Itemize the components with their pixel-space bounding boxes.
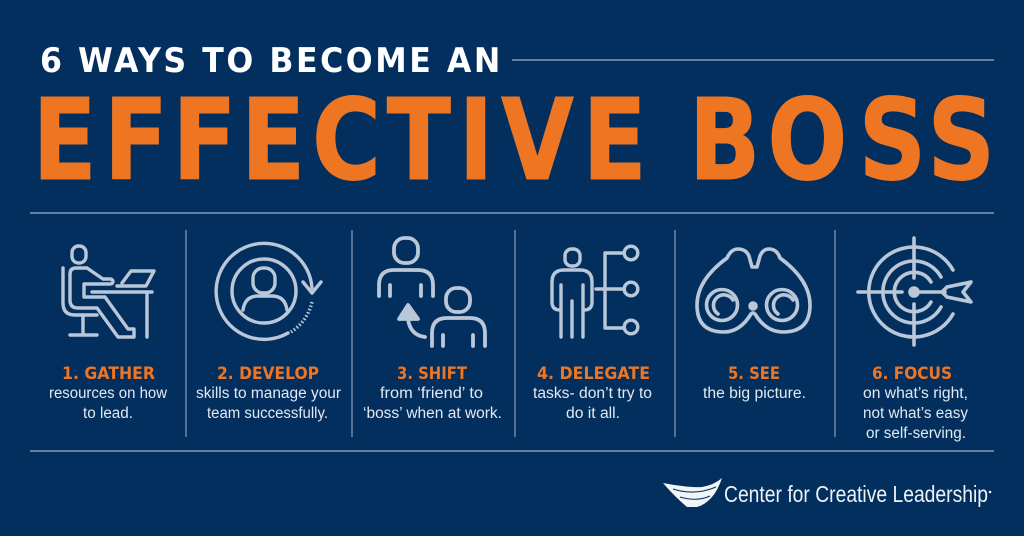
step 1: to lead. — [83, 405, 133, 422]
title: main heading: EFFECTIVE BOSS — [33, 76, 995, 206]
logo: sail mark — [663, 478, 722, 507]
step 3: ‘boss’ when at work. — [363, 405, 502, 422]
step 5: 5. SEE — [728, 364, 780, 384]
step 4: tasks- don’t try to — [533, 385, 652, 402]
step 2: 2. DEVELOP — [217, 364, 319, 384]
step 3: 3. SHIFT — [397, 364, 467, 384]
step 6: or self-serving. — [866, 425, 966, 442]
step 3 — [363, 364, 502, 422]
icon: target with arrow — [858, 238, 971, 345]
logo: registered mark — [989, 491, 991, 493]
icon: person in circular arrow — [216, 243, 321, 339]
icon: delegating person — [552, 246, 638, 337]
step 2: skills to manage your — [196, 385, 341, 402]
icon: shifting people — [379, 238, 485, 346]
step 6: on what’s right, — [863, 385, 968, 402]
step 5: the big picture. — [703, 385, 806, 402]
step 6: 6. FOCUS — [872, 364, 952, 384]
step 3: from ‘friend’ to — [380, 385, 483, 402]
step 2 — [196, 364, 341, 422]
step 4: do it all. — [566, 405, 620, 422]
step 2: team successfully. — [207, 405, 328, 422]
step 5 — [703, 364, 806, 402]
icon: person at desk — [63, 246, 154, 337]
step 6: not what’s easy — [863, 405, 968, 422]
icon: binoculars — [697, 249, 810, 332]
title: first line: 6 WAYS TO BECOME AN — [40, 41, 500, 80]
step 4: 4. DELEGATE — [537, 364, 650, 384]
step 1: resources on how — [49, 385, 168, 402]
step 1 — [49, 364, 168, 422]
step 6 — [863, 364, 968, 442]
step 1: 1. GATHER — [62, 364, 155, 384]
step 4 — [533, 364, 652, 422]
